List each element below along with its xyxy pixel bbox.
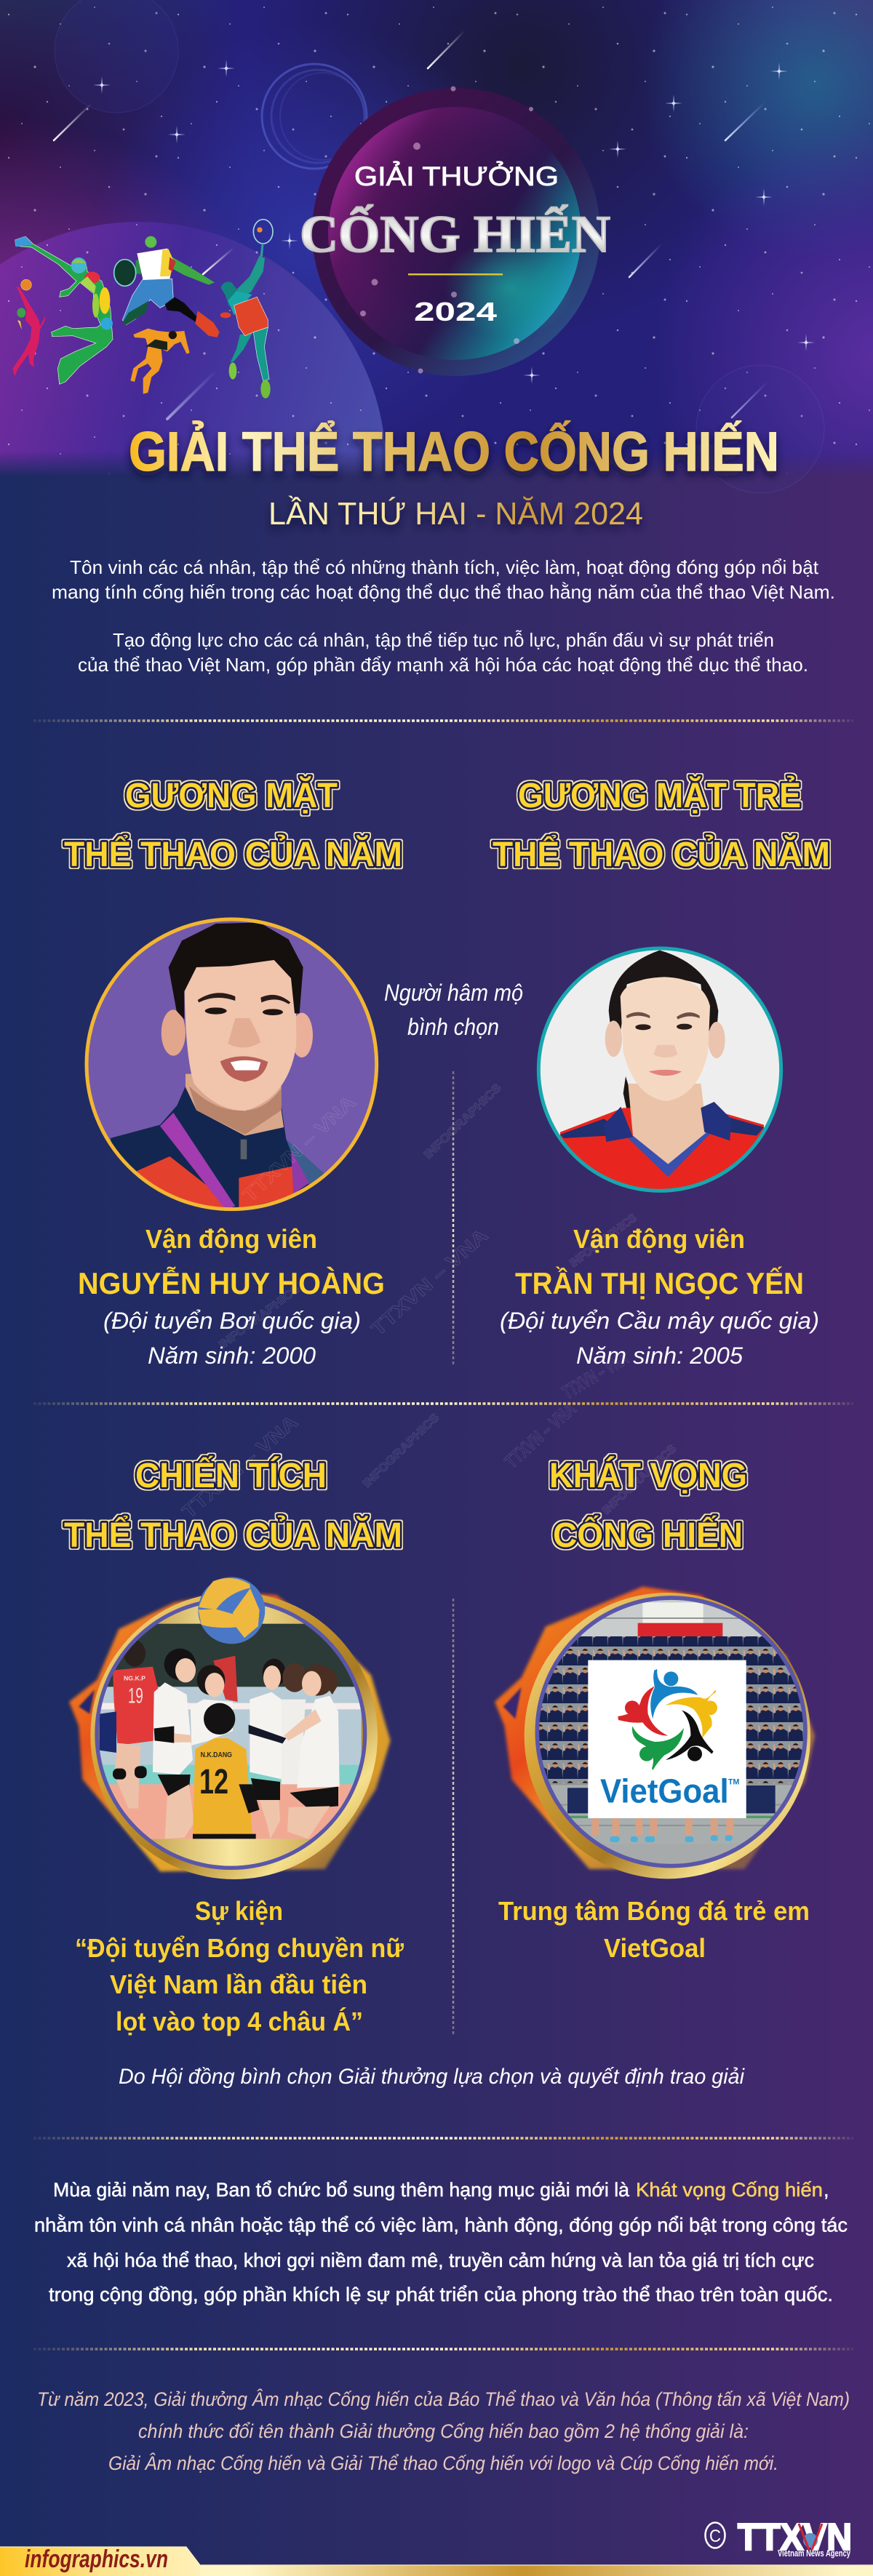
athlete caption right [500, 1224, 819, 1369]
libero in yellow: N.K.DANG [201, 1751, 232, 1759]
faint bubble bottom right [696, 365, 824, 493]
central orb [312, 86, 600, 376]
intro paragraphs: Tôn vinh các cá nhân, tập thể có những thành tích, việc làm, hoạt động đóng góp nổi bật [70, 556, 819, 578]
caption: volleyball event: Việt Nam lần đầu tiên [110, 1969, 367, 1999]
giai thuong: GIẢI THƯỞNG [354, 161, 559, 191]
caption: VietGoal [498, 1896, 810, 1963]
agency logo TTXVN: TTXVN [738, 2516, 852, 2559]
athlete caption left: (Đội tuyển Bơi quốc gia) [103, 1308, 361, 1334]
paragraph: award history [37, 2388, 850, 2474]
selection note: Do Hội đồng bình chọn Giải thưởng lựa chọn và quyết định trao giải [119, 2065, 745, 2089]
paragraph: new category: nhằm tôn vinh cá nhân hoặc tập thể có việc làm, hành động, đóng góp nổi bật trong công tác [34, 2214, 848, 2236]
athlete caption left: Vận động viên [146, 1224, 317, 1254]
flames [69, 1591, 391, 1871]
heading: chien tich the thao cua nam: CHIẾN TÍCH [135, 1456, 327, 1495]
athlete caption right: TRẦN THỊ NGỌC YẾN [515, 1266, 804, 1300]
volleyball [198, 1577, 265, 1644]
meteors [54, 31, 768, 419]
faint bubble top left [55, 0, 178, 113]
white jersey players [153, 1649, 209, 1839]
hero: starry space banner [0, 0, 873, 493]
paragraph: new category: Khát vọng Cống hiến [636, 2179, 823, 2201]
athlete: green jumper [15, 236, 113, 384]
intro paragraphs [52, 556, 835, 676]
VietGoal logo [588, 1660, 746, 1818]
footer bar [0, 2545, 873, 2576]
caption: VietGoal: VietGoal [604, 1933, 706, 1963]
watermarks: INFOGRAPHICS [600, 1442, 679, 1517]
watermarks: TTXVN – VNA [178, 1411, 302, 1523]
athlete caption left [78, 1224, 385, 1369]
left opponent [100, 1640, 159, 1809]
intro paragraphs: Tạo động lực cho các cá nhân, tập thể tiếp tục nỗ lực, phấn đấu vì sự phát triển [113, 629, 774, 651]
subtitle: LẦN THỨ HAI - NĂM 2024 [268, 495, 643, 532]
photo: 19 [128, 1684, 143, 1708]
athlete caption right: (Đội tuyển Cầu mây quốc gia) [500, 1308, 819, 1334]
agency logo TTXVN: C [709, 2527, 721, 2546]
heading: guong mat the thao cua nam: GƯƠNG MẶT [125, 776, 338, 815]
fans vote note: Người hâm mộ [384, 980, 523, 1006]
year: 2024 [414, 297, 497, 327]
sparkles [93, 60, 815, 384]
heading: guong mat tre the thao cua nam [493, 775, 830, 874]
intro paragraphs: của thể thao Việt Nam, góp phần đẩy mạnh xã hội hóa các hoạt động thể dục thể thao. [78, 654, 808, 676]
paragraph: new category: trong cộng đồng, góp phần khích lệ sự phát triển của phong trào thể thao trên toàn quốc. [49, 2284, 833, 2305]
cong hien: CỐNG HIẾN [300, 204, 610, 263]
athlete: tennis player [220, 220, 273, 399]
watermarks: TTXVN – VNA [239, 1091, 360, 1206]
caption: volleyball event: “Đội tuyển Bóng chuyền nữ [75, 1933, 404, 1963]
heading: chien tich the thao cua nam [64, 1456, 402, 1555]
libero in yellow [193, 1703, 260, 1839]
heading: chien tich the thao cua nam: THỂ THAO CỦA NĂM [64, 1515, 402, 1555]
caption: volleyball event: lọt vào top 4 châu Á” [116, 2007, 363, 2036]
medal: VietGoal team photo [495, 1587, 815, 1879]
VietGoal logo: TM [728, 1777, 740, 1786]
watermarks: TTXVN – VNA [559, 1347, 632, 1403]
portrait: Tran Thi Ngoc Yen [538, 948, 781, 1195]
paragraph: new category: , [824, 2179, 829, 2201]
heading: guong mat tre the thao cua nam: GƯƠNG MẶT TRẺ [518, 775, 801, 815]
athlete caption right: Năm sinh: 2005 [576, 1343, 743, 1369]
back player in red [213, 1656, 238, 1702]
paragraph: new category: xã hội hóa thể thao, khơi gợi niềm đam mê, truyền cảm hứng và lan tỏa giá trị tích cực [67, 2249, 814, 2271]
photo [537, 1597, 806, 1866]
athlete caption left: NGUYỄN HUY HOÀNG [78, 1265, 385, 1300]
gold rule [408, 273, 503, 275]
planet behind athletes [0, 222, 386, 473]
paragraph: award history: Giải Âm nhạc Cống hiến và Giải Thể thao Cống hiến với logo và Cúp Cống hiến mới. [108, 2452, 778, 2474]
watermarks: INFOGRAPHICS [567, 1212, 639, 1270]
purple ring [537, 1598, 805, 1866]
athletes illustration [12, 220, 273, 399]
watermarks [178, 1081, 679, 1523]
caption: volleyball event: Sự kiện [195, 1896, 283, 1926]
award logo text [300, 161, 610, 327]
medal: volleyball team photo [69, 1577, 391, 1879]
heading: guong mat tre the thao cua nam: THỂ THAO CỦA NĂM [493, 834, 830, 874]
fans vote note: bình chọn [407, 1014, 499, 1040]
footer bar: infographics.vn [25, 2545, 168, 2573]
heading: khat vong cong hien: CỐNG HIẾN [553, 1515, 743, 1555]
logo figures [618, 1669, 717, 1770]
watermarks: INFOGRAPHICS [217, 1283, 303, 1351]
ringed bubble [262, 64, 367, 169]
portrait: Nguyen Huy Hoang [87, 919, 377, 1215]
heading: guong mat the thao cua nam [64, 776, 402, 874]
athlete: rugby runner [114, 236, 220, 337]
fans vote note [384, 980, 523, 1040]
caption: volleyball event [75, 1896, 404, 2036]
photo [100, 1624, 362, 1839]
VietGoal logo: VietGoal [600, 1772, 729, 1809]
caption: VietGoal: Trung tâm Bóng đá trẻ em [498, 1896, 810, 1926]
photo: NG.K.P [124, 1675, 146, 1682]
watermarks: TTXVN – VNA [501, 1398, 580, 1472]
heading: guong mat the thao cua nam: THỂ THAO CỦA NĂM [64, 834, 402, 874]
purple ring [97, 1600, 365, 1868]
flames [495, 1587, 815, 1869]
athlete: sprinter [130, 329, 190, 394]
heading: khat vong cong hien: KHÁT VỌNG [549, 1456, 747, 1495]
watermarks: INFOGRAPHICS [361, 1412, 442, 1490]
paragraph: award history: chính thức đổi tên thành Giải thưởng Cống hiến bao gồm 2 hệ thống giải là: [138, 2420, 749, 2442]
athlete: volleyball girl [12, 279, 46, 376]
watermarks: TTXVN – VNA [367, 1224, 493, 1340]
heading: khat vong cong hien [549, 1456, 747, 1555]
watermarks: INFOGRAPHICS [422, 1081, 504, 1161]
athlete caption right: Vận động viên [573, 1224, 745, 1254]
intro paragraphs: mang tính cống hiến trong các hoạt động thể dục thể thao hằng năm của thể thao Việt Nam. [52, 581, 835, 603]
main title: GIẢI THỂ THAO CỐNG HIẾN [129, 420, 779, 483]
paragraph: new category [34, 2179, 848, 2305]
libero in yellow: 12 [199, 1762, 228, 1801]
gold disc [90, 1592, 378, 1879]
paragraph: new category: Mùa giải năm nay, Ban tổ chức bổ sung thêm hạng mục giải mới là [53, 2179, 630, 2201]
gold disc [525, 1593, 810, 1879]
athlete caption left: Năm sinh: 2000 [148, 1343, 316, 1369]
